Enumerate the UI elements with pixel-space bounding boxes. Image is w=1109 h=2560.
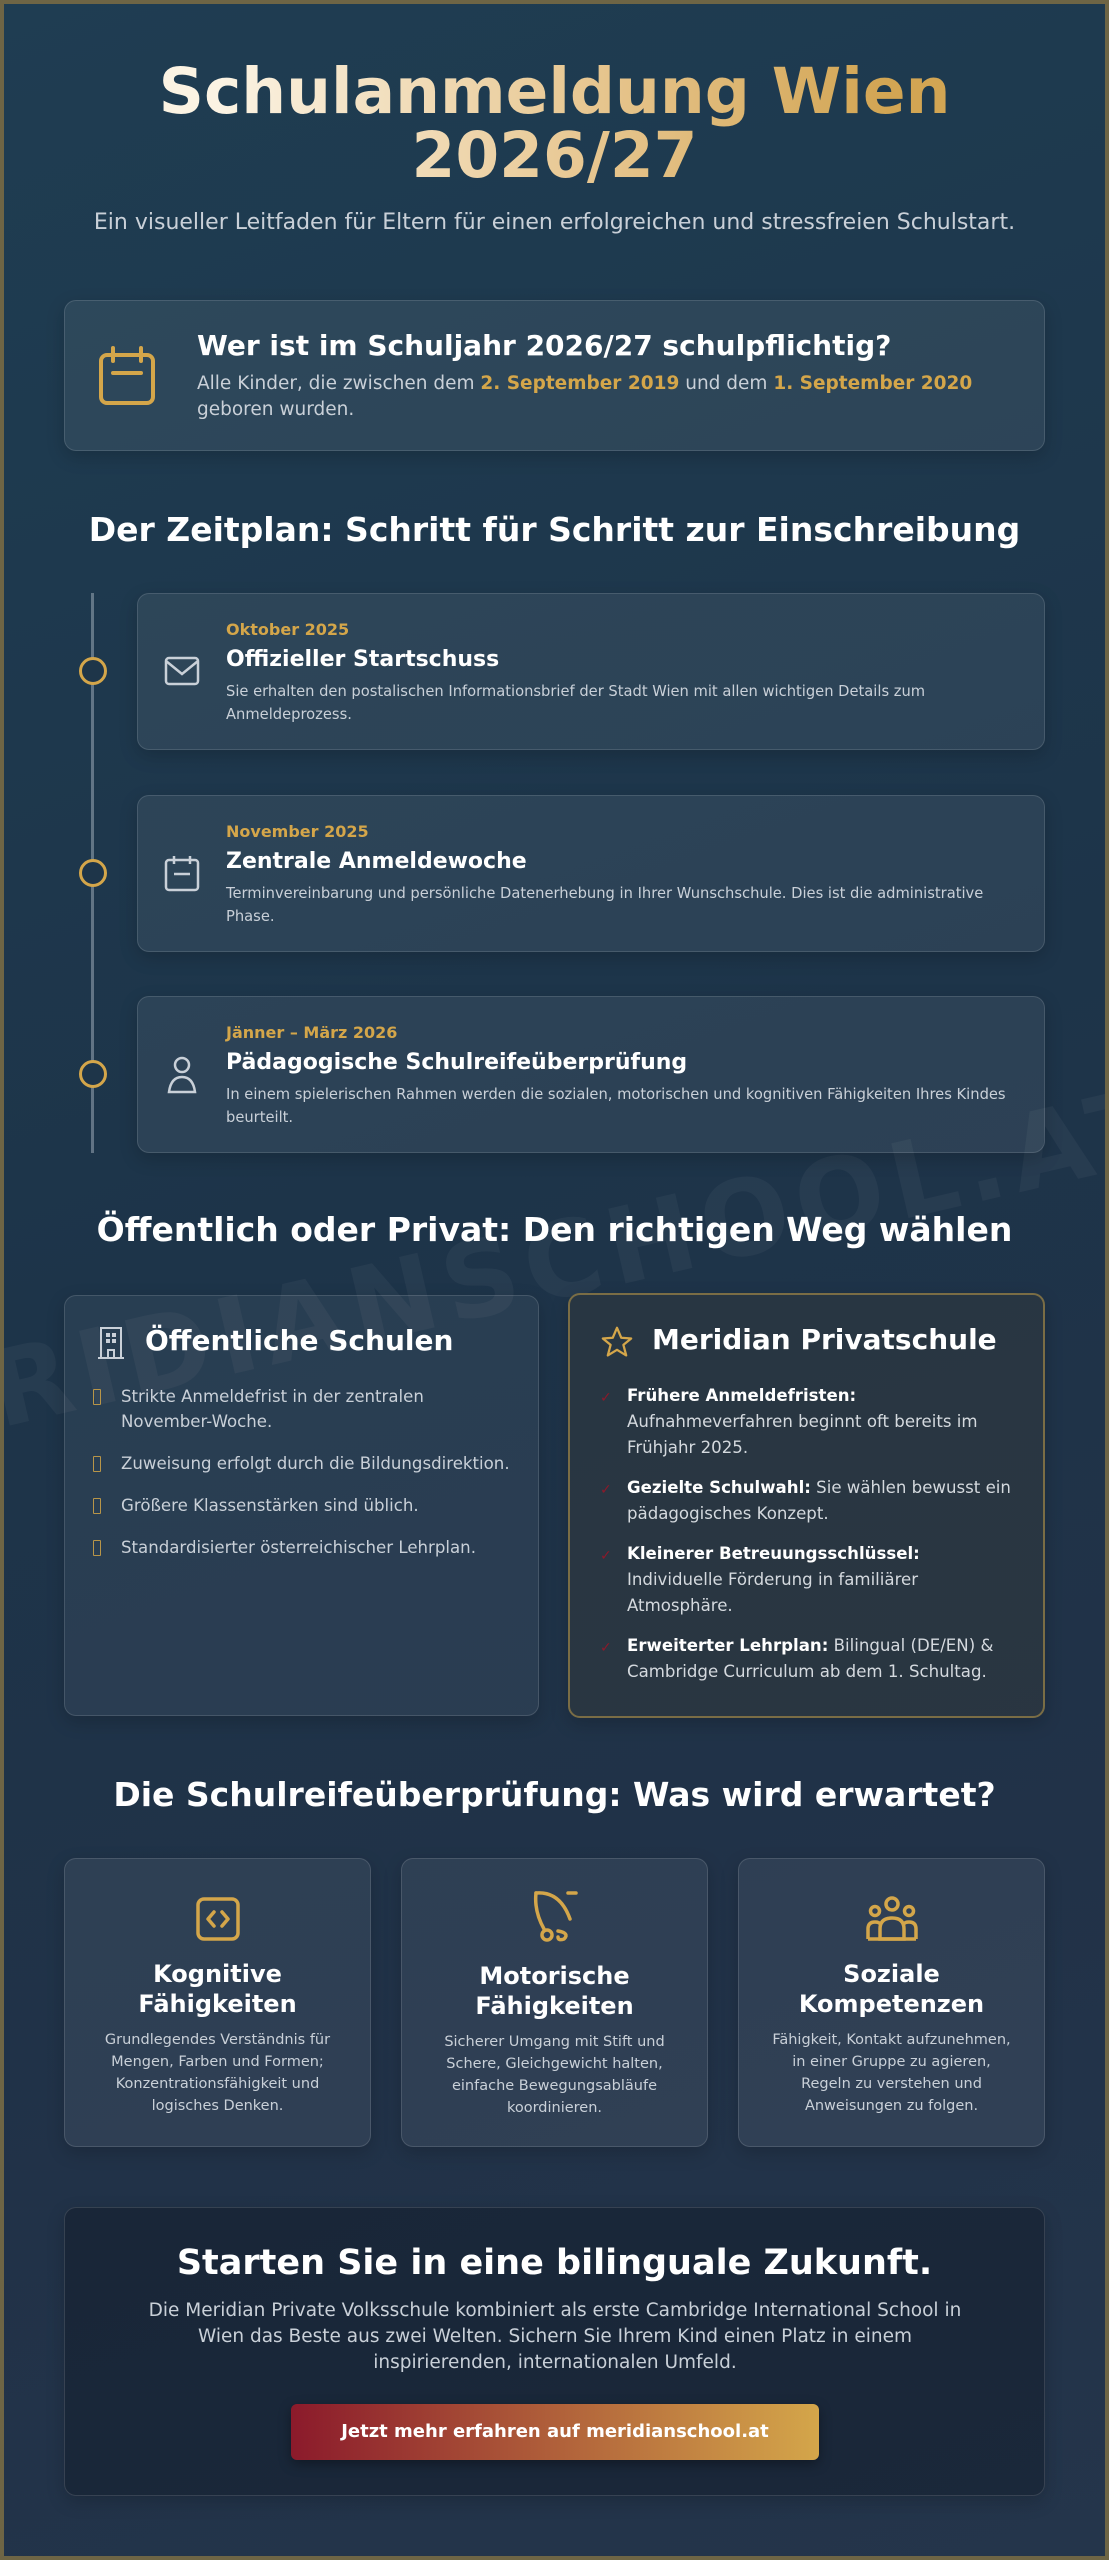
card: soziale kompetenzen: Fähigkeit, Kontakt aufzunehmen, in einer Gruppe zu agieren, Regeln zu verstehen und Anweisungen zu folgen. [772,2032,1011,2114]
card [137,795,1045,952]
list: Standardisierter österreichischer Lehrplan. [121,1538,476,1557]
list: Frühere Anmeldefristen: Aufnahmeverfahren beginnt oft bereits im Frühjahr 2025. [627,1386,978,1457]
title [0,60,1109,188]
marker [79,1060,107,1088]
card: Sie erhalten den postalischen Informationsbrief der Stadt Wien mit allen wichtigen Details zum Anmeldeprozess. [226,683,925,723]
cta heading: Starten Sie in eine bilinguale Zukunft. [177,2243,932,2283]
icon: calendar [99,346,155,405]
list: Größere Klassenstärken sind üblich. [121,1496,419,1515]
icon: star [602,1326,632,1357]
card: Zentrale Anmeldewoche [226,849,527,874]
card: Offizieller Startschuss [226,647,499,672]
button: Jetzt mehr erfahren auf meridianschool.at [341,2421,769,2442]
card: Pädagogische Schulreifeüberprüfung [226,1050,687,1075]
heading: Meridian Privatschule [652,1323,997,1356]
panel: öffentliche schulen [64,1295,539,1716]
card: Terminvereinbarung und persönliche Datenerhebung in Ihrer Wunschschule. Dies ist die administrative Phase. [226,885,983,925]
heading: zeitplan: Der Zeitplan: Schritt für Schritt zur Einschreibung [89,510,1020,549]
timeline: step 2 [79,795,1045,956]
heading: schulreifeüberprüfung: Die Schulreifeüberprüfung: Was wird erwartet? [113,1775,996,1814]
icon: envelope [164,656,200,686]
heading: öffentlich oder privat: Öffentlich oder Privat: Den richtigen Weg wählen [97,1210,1012,1249]
card: kognitive fähigkeiten: Grundlegendes Verständnis für Mengen, Farben und Formen; Konzentrationsfähigkeit und logisches Denken. [105,2032,330,2114]
list: Strikte Anmeldefrist in der zentralen November-Woche. [121,1387,424,1431]
card: motorische fähigkeiten: Fähigkeiten [475,1992,634,2020]
card: motorische fähigkeiten [401,1858,708,2147]
icon: building [98,1327,124,1359]
marker [79,859,107,887]
timeline: step 3 [79,996,1045,1158]
text: Alle Kinder, die zwischen dem 2. September 2019 und dem 1. September 2020 geboren wurden. [197,373,972,420]
panel: meridian privatschule [568,1293,1045,1718]
icon: scissors [534,1891,578,1942]
list: Gezielte Schulwahl: Sie wählen bewusst ein pädagogisches Konzept. [627,1478,1011,1523]
timeline: step 1 [79,593,1045,754]
cta text: Die Meridian Private Volksschule kombiniert als erste Cambridge International School in Wien das Beste aus zwei Welten. Sichern Sie Ihrem Kind einen Platz in einem inspirierenden, internationalen Umfeld. [149,2300,961,2373]
list: Erweiterter Lehrplan: Bilingual (DE/EN) & Cambridge Curriculum ab dem 1. Schultag. [627,1636,993,1681]
card: soziale kompetenzen [738,1858,1045,2147]
card: soziale kompetenzen: Soziale [843,1960,940,1988]
panel: call to action [64,2207,1045,2496]
icon: code [196,1897,240,1941]
card: motorische fähigkeiten: Sicherer Umgang mit Stift und Schere, Gleichgewicht halten, einfache Bewegungsabläufe koordinieren. [444,2034,665,2116]
timeline line [91,593,94,1153]
card [137,593,1045,750]
card: Oktober 2025 [226,620,349,639]
title: Schulanmeldung Wien [159,55,950,128]
icon: group [866,1896,918,1941]
title: 2026/27 [411,119,698,192]
card: Jänner – März 2026 [226,1023,397,1042]
card: November 2025 [226,822,369,841]
card: motorische fähigkeiten: Motorische [479,1962,630,1990]
list: ✓ [600,1640,612,1656]
list: Zuweisung erfolgt durch die Bildungsdirektion. [121,1454,510,1473]
card: kognitive fähigkeiten: Fähigkeiten [138,1990,297,2018]
card: kognitive fähigkeiten: Kognitive [153,1960,282,1988]
icon: person [168,1056,196,1094]
card: kognitive fähigkeiten [64,1858,371,2147]
icon: calendar [164,856,200,892]
list: ✓ [600,1482,612,1498]
list: ✓ [600,1390,612,1406]
list [600,1386,1011,1681]
list [93,1387,510,1557]
list: Kleinerer Betreuungsschlüssel: Individuelle Förderung in familiärer Atmosphäre. [627,1544,920,1615]
panel: schulpflicht [64,300,1045,451]
card: In einem spielerischen Rahmen werden die sozialen, motorischen und kognitiven Fähigkeiten Ihres Kindes beurteilt. [226,1086,1006,1126]
button [291,2404,819,2460]
subtitle: Ein visueller Leitfaden für Eltern für einen erfolgreichen und stressfreien Schulstart. [94,210,1015,235]
card: soziale kompetenzen: Kompetenzen [799,1990,984,2018]
heading: Öffentliche Schulen [145,1324,453,1357]
list: ✓ [600,1548,612,1564]
marker [79,657,107,685]
heading: Wer ist im Schuljahr 2026/27 schulpflichtig? [197,329,891,362]
card [137,996,1045,1153]
